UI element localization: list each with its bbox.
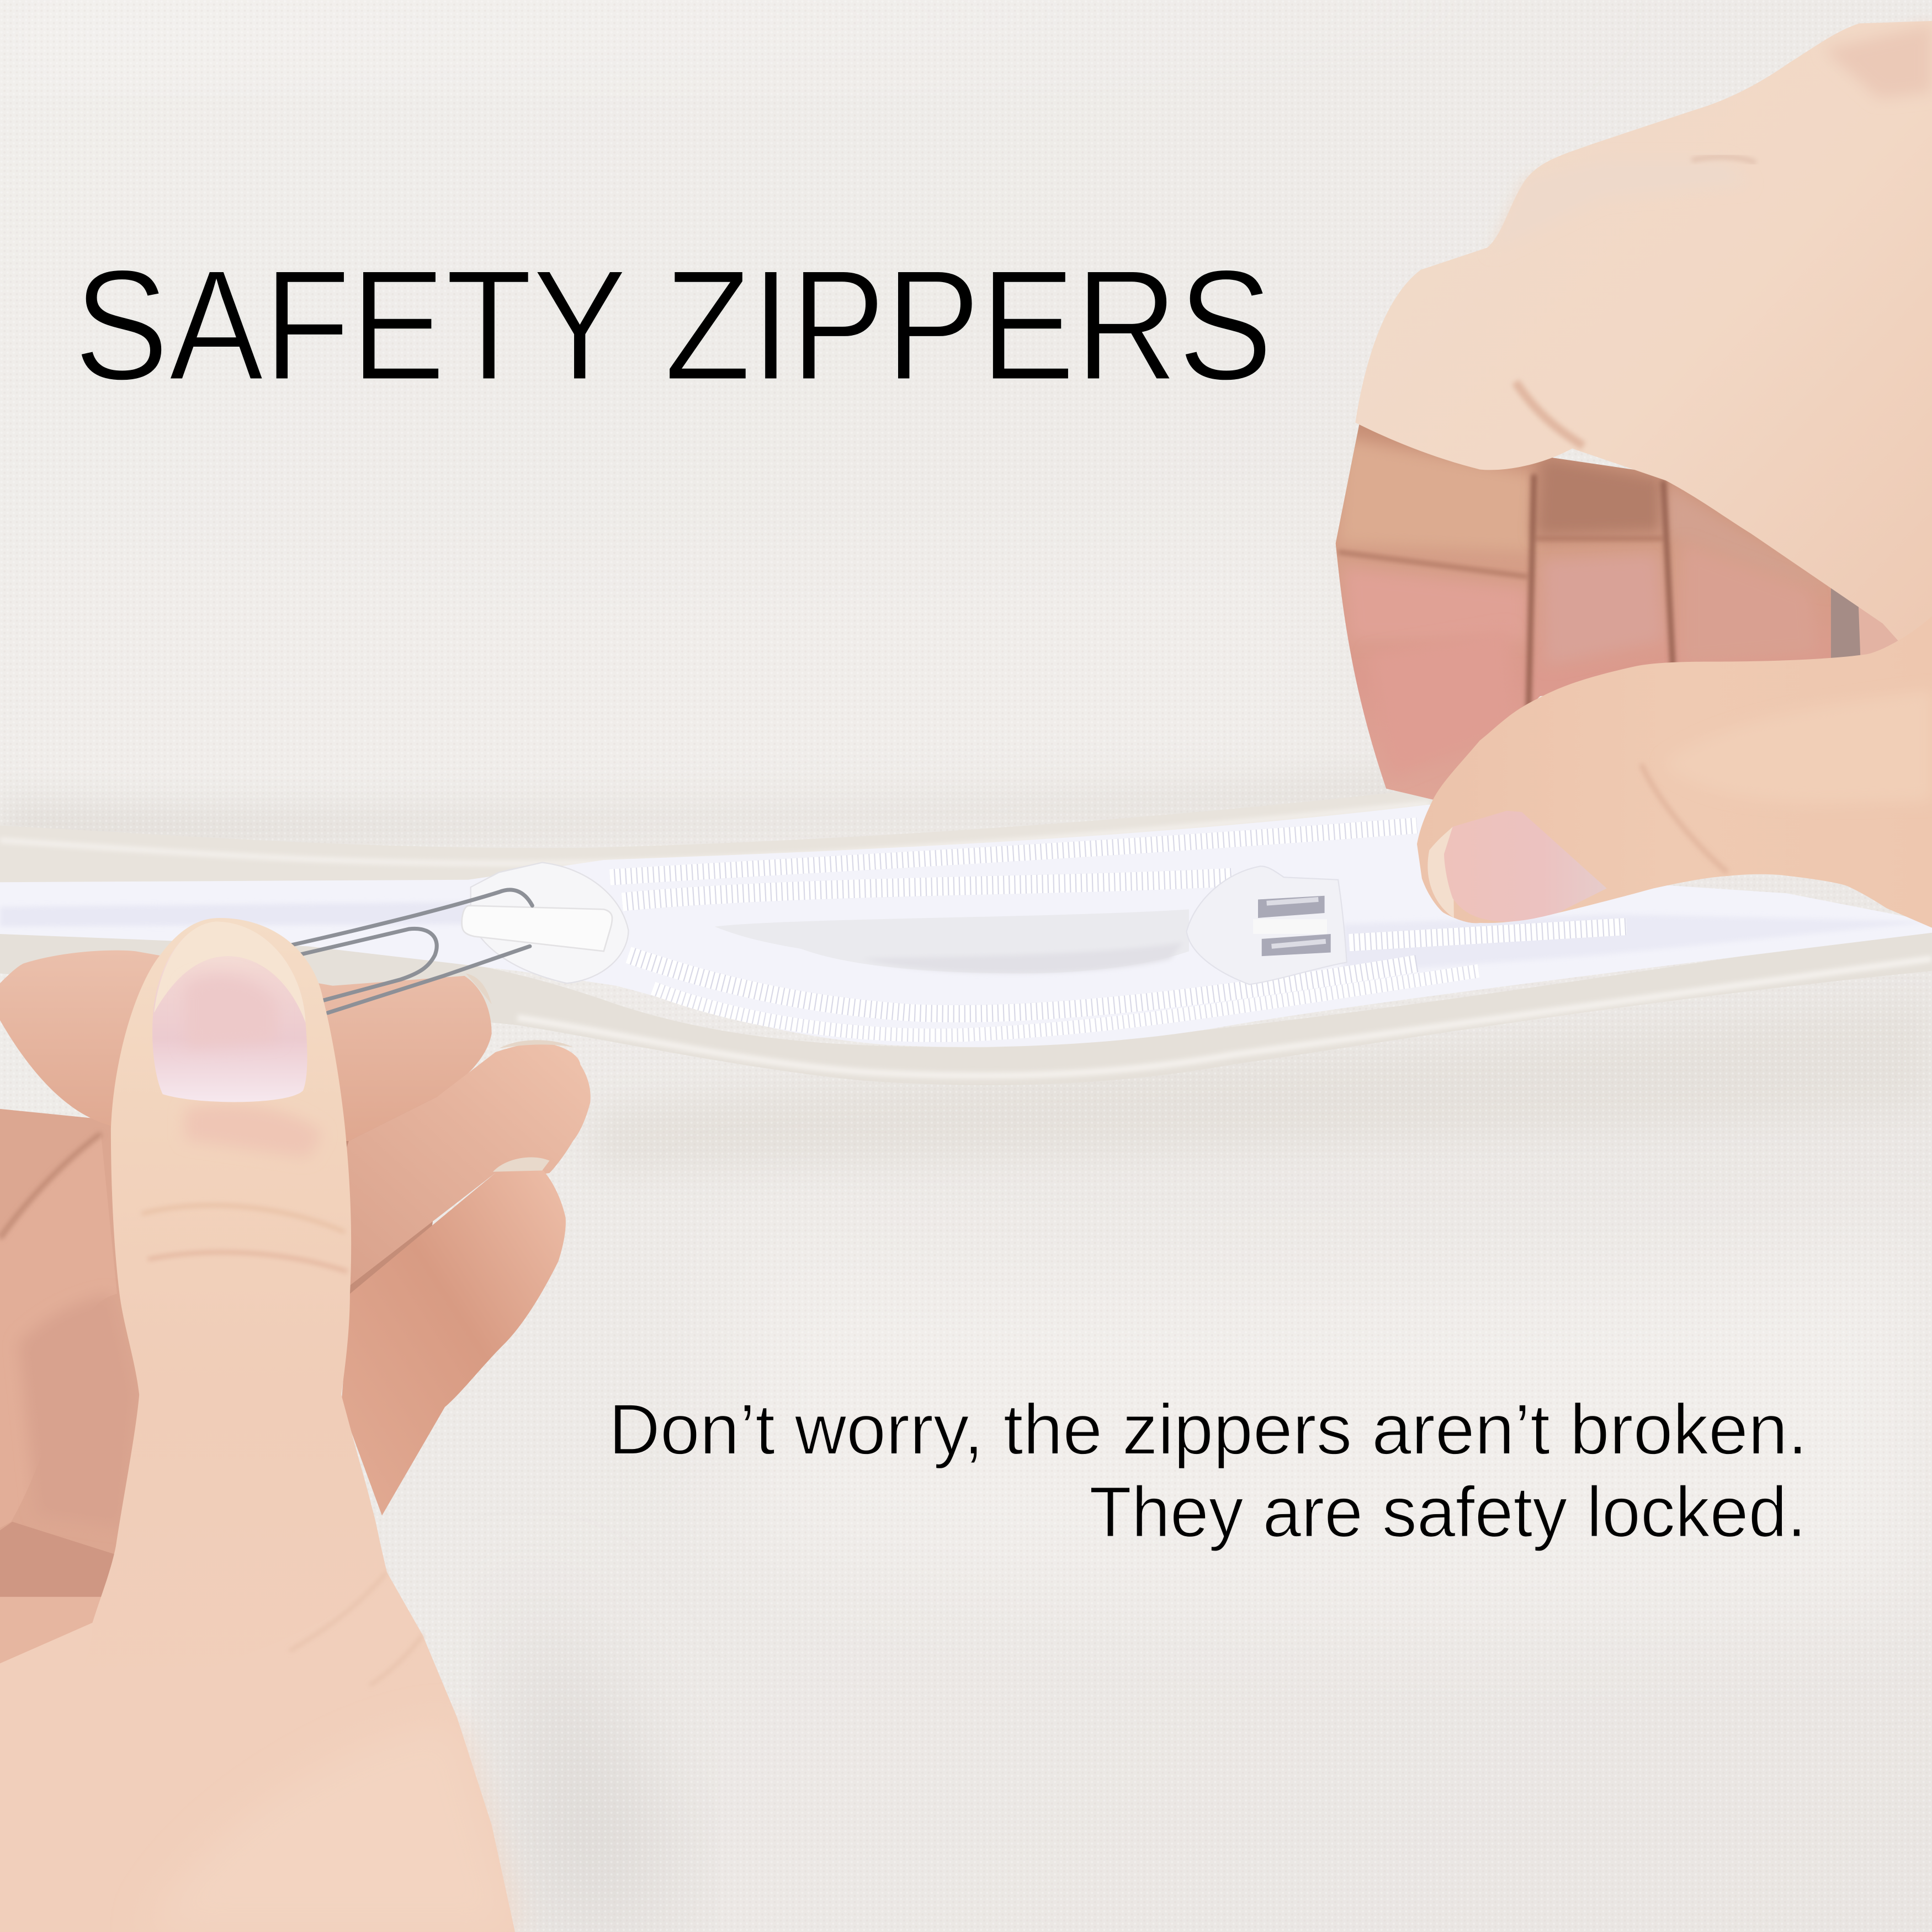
- right thumb nail: [1427, 811, 1607, 922]
- right hand: [1331, 21, 1932, 928]
- icon: paperclip: [286, 890, 532, 1013]
- shadow gap behind fingers: [1831, 582, 1861, 662]
- ring finger: [341, 1167, 566, 1516]
- white zipper tape: [0, 805, 1932, 1047]
- left thumb and wrist: [0, 918, 515, 1932]
- index finger: [0, 951, 492, 1146]
- back of hand: [1355, 21, 1932, 647]
- fabric piping below zipper: [0, 927, 1932, 1085]
- title: SAFETY ZIPPERS: [74, 236, 1273, 413]
- left hand fingers and palm: [0, 951, 591, 1678]
- crease shadows between fingers: [296, 1060, 456, 1355]
- thumb: [65, 918, 387, 1699]
- palm behind fingers: [0, 1109, 160, 1663]
- inner fingers: [1336, 424, 1831, 799]
- icon: left zipper slider with pull tab: [462, 862, 628, 983]
- caption line two: They are safety locked.: [1089, 1472, 1806, 1552]
- fabric piping above zipper: [0, 789, 1454, 890]
- pink web of skin beside gap: [1858, 594, 1904, 660]
- middle finger: [320, 1042, 591, 1286]
- right thumb: [1417, 616, 1932, 928]
- left thumb nail: [152, 922, 307, 1102]
- caption text: [609, 1390, 1808, 1552]
- inner lining gap: [715, 909, 1189, 973]
- icon: right zipper slider: [1187, 866, 1347, 984]
- caption line one: Don’t worry, the zippers aren’t broken.: [609, 1390, 1808, 1469]
- zipper assembly: [0, 789, 1932, 1085]
- wrist and base of hand: [0, 1395, 515, 1932]
- zipper teeth: [610, 826, 1626, 1036]
